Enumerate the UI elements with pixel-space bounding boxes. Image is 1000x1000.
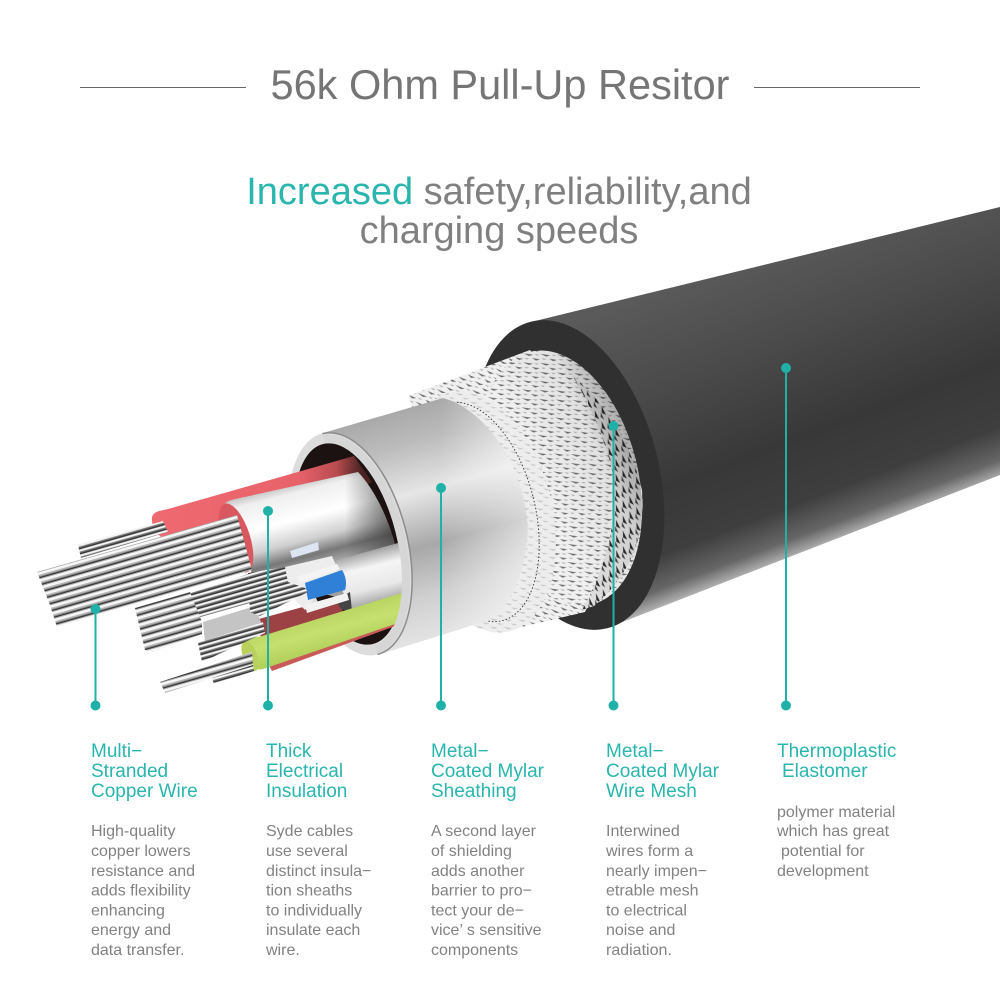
column: metal-coated mylar wire mesh: Metal− [606, 741, 664, 762]
column: metal-coated mylar sheathing: A second layer [431, 823, 537, 840]
column: metal-coated mylar sheathing: barrier to pro− [431, 882, 532, 900]
callout line: wire mesh [608, 421, 618, 710]
column: metal-coated mylar wire mesh: Wire Mesh [606, 781, 697, 802]
column: thermoplastic elastomer: which has great [776, 823, 890, 840]
column: metal-coated mylar sheathing: tect your de− [431, 902, 524, 920]
column: thick electrical insulation: Thick [266, 741, 312, 762]
subtitle [246, 171, 752, 252]
column: multi-stranded copper wire: Multi− [91, 741, 142, 762]
red insulated wire [152, 456, 372, 545]
column: thermoplastic elastomer: polymer material [777, 804, 895, 821]
second shielded wire [327, 543, 403, 612]
column: thick electrical insulation: use several [266, 843, 348, 860]
column: metal-coated mylar sheathing: vice’ s sensitive [431, 922, 542, 939]
column: thick electrical insulation: Syde cables [266, 823, 353, 840]
green wire strand bundle [160, 652, 254, 693]
column: metal-coated mylar sheathing [431, 741, 545, 959]
red lower wire strip [268, 618, 398, 671]
column: metal-coated mylar wire mesh [605, 741, 720, 959]
column: multi-stranded copper wire: enhancing [91, 902, 165, 920]
column: multi-stranded copper wire [91, 741, 198, 959]
middle strand bundles [135, 567, 308, 652]
column: metal-coated mylar sheathing: Coated Mylar [431, 761, 545, 782]
column: thick electrical insulation [265, 741, 371, 959]
column: multi-stranded copper wire: copper lowers [91, 843, 191, 860]
column: multi-stranded copper wire: Stranded [91, 761, 168, 782]
column: multi-stranded copper wire: High-quality [91, 823, 175, 840]
callout line: copper wire [90, 604, 100, 710]
column: metal-coated mylar wire mesh: radiation. [606, 942, 672, 959]
column: thick electrical insulation: Insulation [266, 781, 347, 802]
column: metal-coated mylar wire mesh: to electrical [606, 902, 687, 920]
callout line: sheathing [436, 483, 446, 710]
silver foil sheath [267, 398, 527, 668]
lower strand bundle [198, 622, 265, 662]
title: 56k Ohm Pull-Up Resitor [271, 61, 730, 108]
dark red inner wire [255, 598, 345, 640]
subtitle: charging speeds [360, 210, 638, 252]
cable illustration [37, 207, 1000, 693]
callout line: elastomer [781, 363, 791, 710]
column: multi-stranded copper wire: energy and [91, 922, 171, 939]
column: thermoplastic elastomer: potential for [781, 843, 865, 860]
blue inner wire [285, 556, 349, 613]
sheath rim [322, 433, 412, 654]
column: thick electrical insulation: tion sheaths [266, 882, 352, 900]
main copper strand bundle [37, 515, 252, 627]
column: multi-stranded copper wire: adds flexibility [91, 882, 191, 900]
column: metal-coated mylar sheathing: of shielding [431, 843, 512, 860]
column: metal-coated mylar wire mesh: noise and [606, 922, 675, 939]
column: metal-coated mylar wire mesh: wires form a [605, 843, 693, 860]
column: multi-stranded copper wire: Copper Wire [91, 781, 198, 802]
column: thermoplastic elastomer: Elastomer [782, 761, 868, 782]
callout line: insulation [263, 506, 273, 710]
column: metal-coated mylar wire mesh: Coated Mylar [606, 761, 720, 782]
column: thermoplastic elastomer [776, 741, 896, 880]
column: metal-coated mylar wire mesh: Interwined [606, 823, 680, 840]
braided wire mesh [380, 333, 667, 649]
column: thick electrical insulation: wire. [265, 942, 300, 959]
column: metal-coated mylar sheathing: components [431, 942, 518, 959]
column: multi-stranded copper wire: data transfer. [91, 942, 184, 959]
subtitle: Increased safety,reliability,and [246, 171, 752, 213]
column: metal-coated mylar wire mesh: etrable mesh [606, 882, 698, 900]
column: multi-stranded copper wire: resistance and [91, 863, 195, 880]
column: thick electrical insulation: insulate each [266, 922, 360, 939]
column: metal-coated mylar sheathing: adds another [431, 863, 525, 880]
column: thermoplastic elastomer: development [777, 863, 869, 880]
column: thick electrical insulation: Electrical [266, 761, 343, 782]
green insulated wire [238, 593, 402, 673]
column: thermoplastic elastomer: Thermoplastic [777, 741, 896, 762]
column: thick electrical insulation: to individually [266, 902, 362, 920]
thin strands: top bundle [78, 521, 168, 558]
column: metal-coated mylar sheathing: Sheathing [431, 781, 517, 802]
column: metal-coated mylar sheathing: Metal− [431, 741, 489, 762]
column: thick electrical insulation: distinct insula− [266, 863, 371, 880]
column: metal-coated mylar wire mesh: nearly impen− [606, 863, 707, 880]
black outer jacket [443, 207, 1000, 650]
silver shielded wire [212, 468, 401, 598]
